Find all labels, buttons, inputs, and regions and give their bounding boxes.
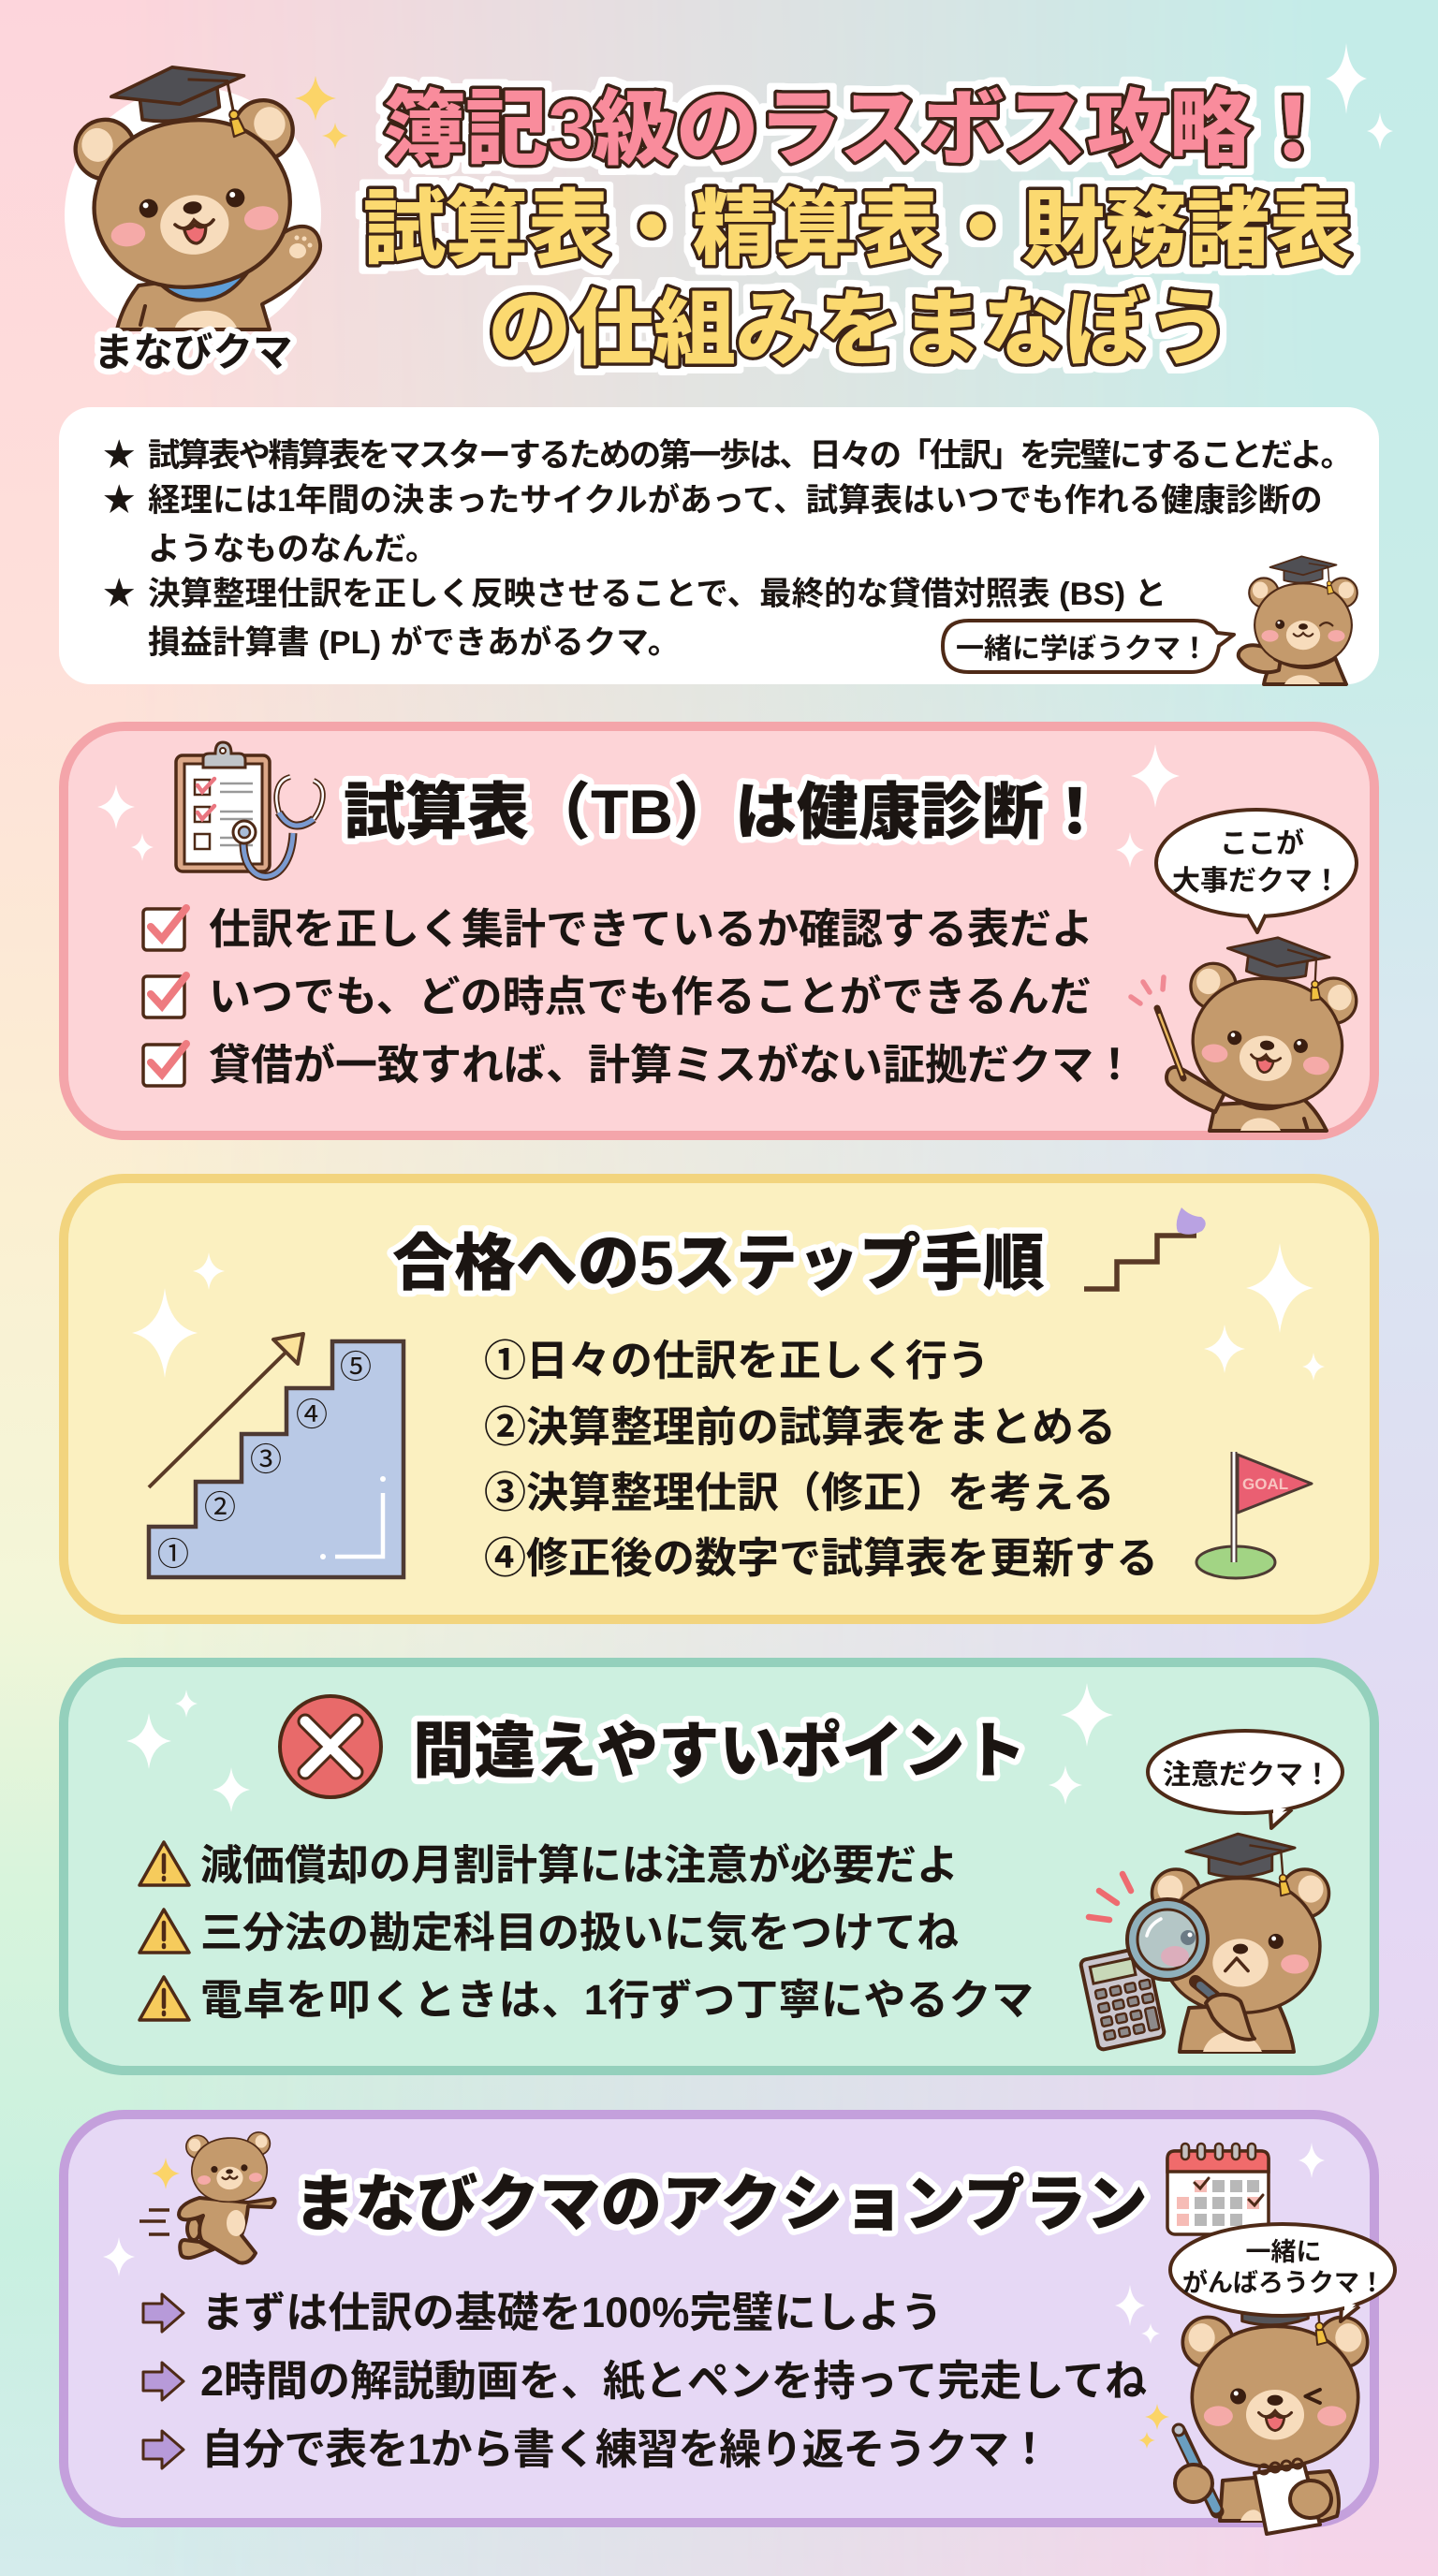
panel: five steps (64, 1178, 1374, 1619)
calculator (1080, 1947, 1165, 2050)
icon: clipboard and stethoscope (176, 742, 323, 876)
staircase diagram: ③ (250, 1442, 282, 1478)
panel: action plan (64, 2115, 1395, 2534)
main title: 試算表・精算表・財務諸表 (363, 183, 1352, 275)
arrow (149, 1334, 303, 1487)
intro text: 試算表や精算表をマスターするための第一歩は、日々の「仕訳」を完璧にすることだよ。 (148, 438, 1353, 474)
intro text: ★ (103, 483, 135, 519)
sparkles (97, 744, 1180, 868)
icon: small stairs with butterfly (1084, 1208, 1206, 1289)
item 2: 三分法の勘定科目の扱いに気をつけてね (200, 1909, 959, 1956)
speech bubble: important (1156, 810, 1357, 932)
speech bubble: important: 大事だクマ！ (1172, 866, 1341, 897)
checklist (143, 905, 1136, 1089)
staircase diagram: ② (204, 1490, 236, 1526)
item 1: まずは仕訳の基礎を100%完璧にしよう (201, 2289, 943, 2336)
speech bubble: caution: 注意だクマ！ (1163, 1760, 1331, 1791)
bear with pointer (1131, 928, 1363, 1131)
icon: running bear (139, 2131, 275, 2263)
intro text: 経理には1年間の決まったサイクルがあって、試算表はいつでも作れる健康診断の (148, 482, 1323, 519)
panel: common mistakes (64, 1662, 1374, 2071)
sparkles (132, 1243, 1325, 1381)
step list: ①日々の仕訳を正しく行う (484, 1337, 990, 1384)
item 1: 仕訳を正しく集計できているか確認する表だよ (209, 905, 1093, 953)
bear with pen and notepad (1173, 2280, 1368, 2534)
step list (484, 1337, 1158, 1582)
intro text: ★ (103, 438, 135, 474)
sparkles (103, 2143, 1325, 2449)
icon: calendar (1167, 2144, 1269, 2234)
main title (363, 82, 1352, 375)
bear with magnifier and calculator (1080, 1834, 1329, 2052)
panel: trial balance (64, 726, 1374, 1135)
heading: 合格への5ステップ手順 (392, 1228, 1045, 1297)
item 3: 自分で表を1から書く練習を繰り返そうクマ！ (201, 2425, 1050, 2473)
action list (143, 2289, 1147, 2473)
intro text: 損益計算書 (PL) ができあがるクマ。 (148, 624, 680, 661)
main title: の仕組みをまなぼう (489, 283, 1230, 375)
speech bubble: do our best: 一緒に (1245, 2238, 1322, 2266)
step list: ②決算整理前の試算表をまとめる (484, 1403, 1116, 1451)
intro text: ようなものなんだ。 (148, 532, 437, 567)
intro text (103, 438, 1353, 661)
speech bubble: do our best (1170, 2224, 1395, 2321)
main title: 簿記3級のラスボス攻略！ (383, 82, 1334, 175)
icon: x mark (280, 1696, 381, 1797)
warning list (139, 1841, 1034, 2024)
speech bubble: caution (1148, 1731, 1343, 1828)
staircase diagram (149, 1334, 404, 1577)
item 1: 減価償却の月割計算には注意が必要だよ (200, 1841, 959, 1889)
bear waving small (1239, 556, 1357, 684)
item 2: 2時間の解説動画を、紙とペンを持って完走してね (200, 2357, 1147, 2405)
step list: ③決算整理仕訳（修正）を考える (484, 1469, 1115, 1516)
magnifier (1127, 1899, 1214, 1997)
header sparkles (295, 43, 1393, 150)
header mascot: manabi bear with white circle (65, 53, 321, 375)
staircase diagram: ① (157, 1537, 189, 1573)
mascot name label: まなびクマ (94, 331, 293, 375)
staircase diagram: ⑤ (340, 1350, 372, 1385)
icon: goal flag (1196, 1452, 1312, 1578)
item 2: いつでも、どの時点でも作ることができるんだ (209, 973, 1092, 1020)
speech bubble: learn together (943, 621, 1234, 672)
speech bubble: learn together: 一緒に学ぼうクマ！ (956, 634, 1209, 665)
heading: まなびクマのアクションプラン (294, 2170, 1148, 2238)
step list: ④修正後の数字で試算表を更新する (484, 1534, 1158, 1582)
heading: 間違えやすいポイント (413, 1717, 1026, 1785)
panel: intro (59, 407, 1379, 684)
icon: goal flag: GOAL (1242, 1475, 1288, 1493)
staircase diagram: ④ (296, 1398, 328, 1433)
item 3: 貸借が一致すれば、計算ミスがない証拠だクマ！ (209, 1041, 1136, 1089)
speech bubble: do our best: がんばろうクマ！ (1182, 2268, 1385, 2297)
intro text: 決算整理仕訳を正しく反映させることで、最終的な貸借対照表 (BS) と (148, 577, 1167, 612)
item 3: 電卓を叩くときは、1行ずつ丁寧にやるクマ (200, 1976, 1034, 2024)
intro text: ★ (103, 577, 135, 612)
sparkles (126, 1683, 1113, 1812)
heading: 試算表（TB）は健康診断！ (344, 777, 1106, 846)
speech bubble: important: ここが (1220, 827, 1304, 859)
